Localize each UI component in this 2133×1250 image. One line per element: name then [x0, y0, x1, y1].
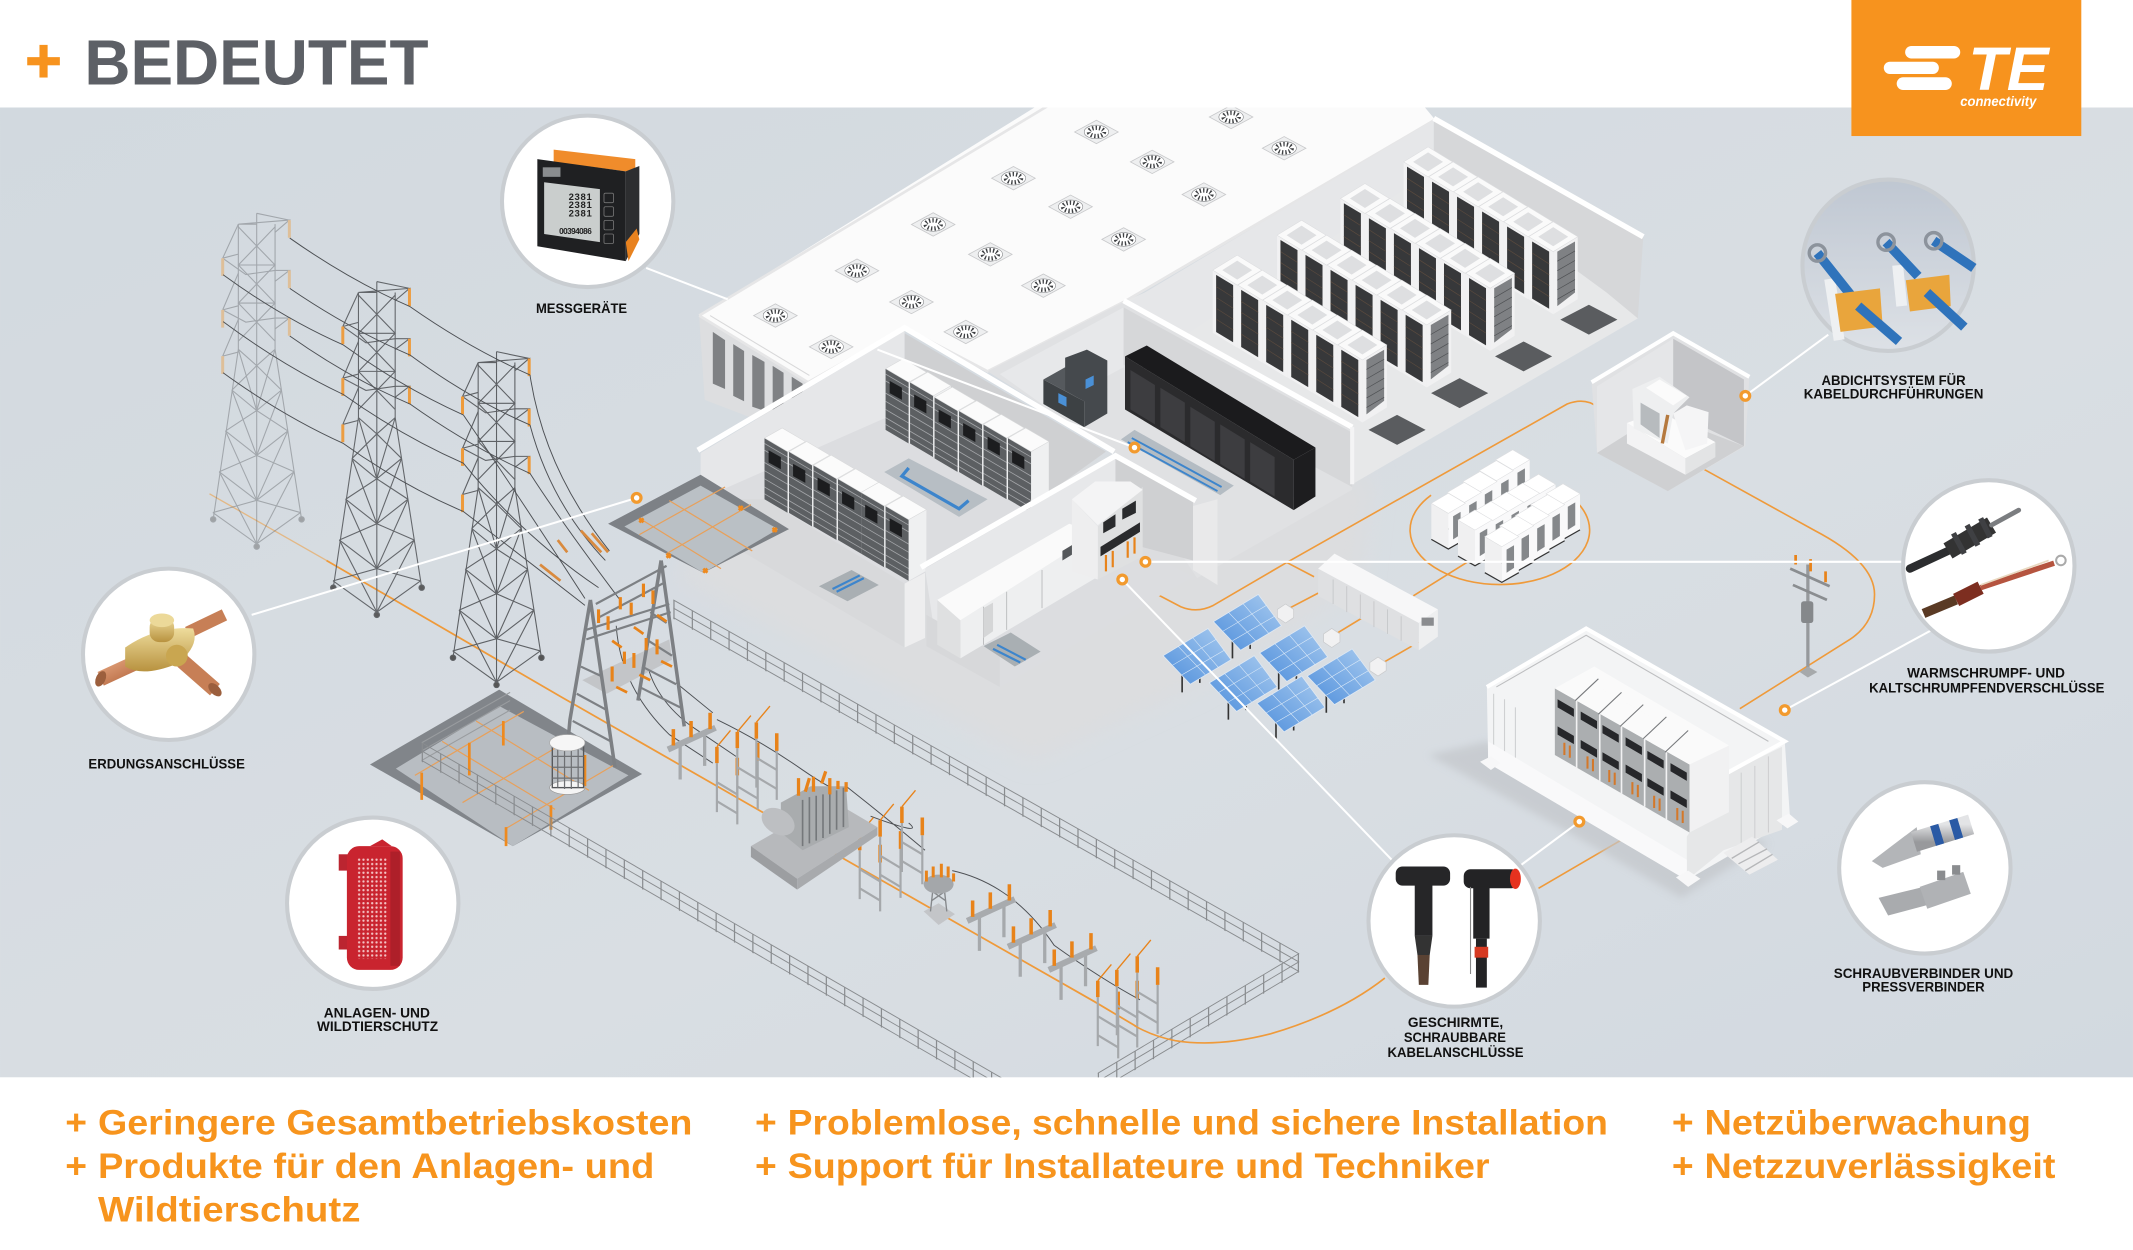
transformer unit [1627, 377, 1715, 475]
server hall [1124, 118, 1643, 484]
orange earth line [209, 494, 1137, 1027]
switchgear cabinets [1555, 667, 1729, 833]
icon: power meter: 2381 [569, 208, 592, 219]
steps [1724, 837, 1778, 875]
label: Anlagen- und Wildtierschutz: WILDTIERSCHUTZ [317, 1019, 438, 1035]
switchgear container [1428, 628, 1798, 898]
cable runs in orange [1124, 401, 1875, 1043]
callout dots [631, 390, 1791, 828]
rack row C [1277, 220, 1451, 388]
white battery cabinets [1431, 450, 1580, 582]
floor grates [1368, 305, 1617, 445]
benefits column one: Produkte für den Anlagen- und [98, 1147, 654, 1186]
small transformer hut [1592, 333, 1749, 491]
substation stands and disconnectors [668, 706, 1158, 1058]
logo: TE Connectivity: TE [1968, 35, 2051, 103]
callout: Abdichtsystem [1802, 180, 1974, 351]
rack row A [1404, 147, 1578, 314]
label: Geschirmte: KABELANSCHLÜSSE [1388, 1044, 1524, 1061]
icon: power meter: 2381 [569, 192, 592, 203]
callout: Anlagen- und Wildtierschutz [287, 818, 458, 989]
benefits column one: + [65, 1147, 87, 1186]
icon: lugs and connectors [1872, 824, 1971, 915]
icon: cable terminations [1910, 510, 2066, 614]
callout: Erdungsanschlüsse [83, 569, 254, 740]
pylon 3 [450, 352, 544, 688]
benefits column one: + [65, 1104, 87, 1143]
label: Abdichtsystem: KABELDURCHFÜHRUNGEN [1804, 386, 1983, 403]
benefits column one: Geringere Gesamtbetriebskosten [98, 1104, 692, 1143]
main transformer [751, 771, 877, 890]
label: Warmschrumpf: KALTSCHRUMPFENDVERSCHLÜSSE [1869, 679, 2104, 696]
rack row B [1340, 184, 1515, 351]
label: Anlagen- und Wildtierschutz [317, 1006, 438, 1035]
cage cylinder [550, 735, 585, 794]
label: Warmschrumpf [1869, 665, 2104, 696]
front row [1485, 484, 1580, 582]
surge arresters on conductors [540, 531, 608, 581]
label: Abdichtsystem [1804, 372, 1983, 403]
fences [422, 600, 1299, 1100]
room three [921, 456, 1217, 687]
benefits column one [65, 1104, 692, 1230]
roof [699, 95, 1435, 382]
label: Geschirmte: GESCHIRMTE, [1408, 1015, 1503, 1031]
black switch cabinets [1125, 346, 1315, 510]
label: Schraubverbinder [1834, 966, 2013, 996]
small transformer [924, 864, 955, 925]
icon: red protection cage [339, 839, 403, 970]
grounding pit small [608, 475, 789, 573]
pylon 1 faded [210, 213, 304, 549]
upper fence [673, 600, 1299, 972]
icon: blue cables through seals [1809, 233, 1974, 341]
label: Erdungsanschlüsse: ERDUNGSANSCHLÜSSE [88, 756, 245, 773]
callout: Schraubverbinder [1839, 782, 2011, 954]
blue cable trench center [1121, 430, 1234, 495]
header bar [0, 0, 2133, 107]
rear row [1431, 450, 1530, 549]
logo: TE Connectivity [1851, 0, 2081, 136]
center room [990, 304, 1350, 474]
icon: T-connector right [1464, 869, 1521, 988]
floor glow under buildings [680, 449, 1374, 762]
leader lines [252, 268, 1937, 865]
callout: Warmschrumpf [1903, 480, 2074, 652]
benefits column one: Wildtierschutz [98, 1191, 360, 1230]
benefits column two: Problemlose, schnelle und sichere Installation [788, 1104, 1608, 1143]
icon: brass ground connector [93, 614, 224, 699]
logo: TE Connectivity: connectivity [1960, 94, 2038, 109]
icon: T-connector left [1396, 867, 1450, 985]
label: Abdichtsystem: ABDICHTSYSTEM FÜR [1821, 372, 1966, 389]
power pylons [210, 213, 1140, 1000]
utility pole [1790, 555, 1830, 677]
room one [698, 328, 1114, 648]
floor trench [819, 570, 879, 601]
label: Anlagen- und Wildtierschutz: ANLAGEN- UND [324, 1006, 430, 1022]
return fence [1098, 954, 1299, 1091]
UPS units [1043, 350, 1107, 427]
benefits column three: + [1672, 1104, 1694, 1143]
main hall [698, 95, 1643, 687]
switchgear in room three [1072, 482, 1143, 579]
rear cabinet row [886, 359, 1049, 513]
benefits column two: + [755, 1104, 777, 1143]
callout: Messgeräte [502, 116, 673, 287]
benefits column three: Netzzuverlässigkeit [1704, 1147, 2056, 1186]
floor trench room three [984, 633, 1041, 667]
icon: power meter: 2381 [569, 200, 592, 211]
white cabinets [937, 524, 1098, 658]
label: Schraubverbinder: SCHRAUBVERBINDER UND [1834, 966, 2013, 982]
overhead conductors [223, 238, 1140, 1000]
benefits column two: Support für Installateure und Techniker [788, 1147, 1490, 1186]
callout: Geschirmte Kabelanschlüsse [1368, 835, 1540, 1007]
benefits column three: + [1672, 1147, 1694, 1186]
cable trench room one [884, 458, 988, 517]
lower fence [422, 743, 1009, 1100]
benefits column two [755, 1104, 1608, 1186]
rack row D [1213, 255, 1387, 423]
grounding pit large [370, 690, 642, 846]
benefits column three [1672, 1104, 2056, 1186]
label: Warmschrumpf: WARMSCHRUMPF- UND [1907, 665, 2065, 681]
title: BEDEUTET [84, 26, 429, 98]
label: Schraubverbinder: PRESSVERBINDER [1862, 980, 1985, 996]
icon: power meter [537, 150, 639, 261]
front cabinet row [765, 428, 926, 581]
benefits column three: Netzüberwachung [1704, 1104, 2031, 1143]
benefits column two: + [755, 1147, 777, 1186]
storage container [1318, 554, 1438, 650]
label: Messgeräte: MESSGERÄTE [536, 300, 627, 317]
label: Geschirmte [1388, 1015, 1524, 1061]
junction boxes [1277, 604, 1386, 676]
middle row [1458, 474, 1556, 566]
pylon 2 [331, 282, 424, 618]
hall side wall with louvers [712, 332, 803, 410]
label: Geschirmte: SCHRAUBBARE [1404, 1030, 1506, 1046]
icon: power meter: 00394086 [559, 227, 592, 236]
solar panels [1163, 594, 1375, 740]
gantry structure [567, 560, 684, 767]
